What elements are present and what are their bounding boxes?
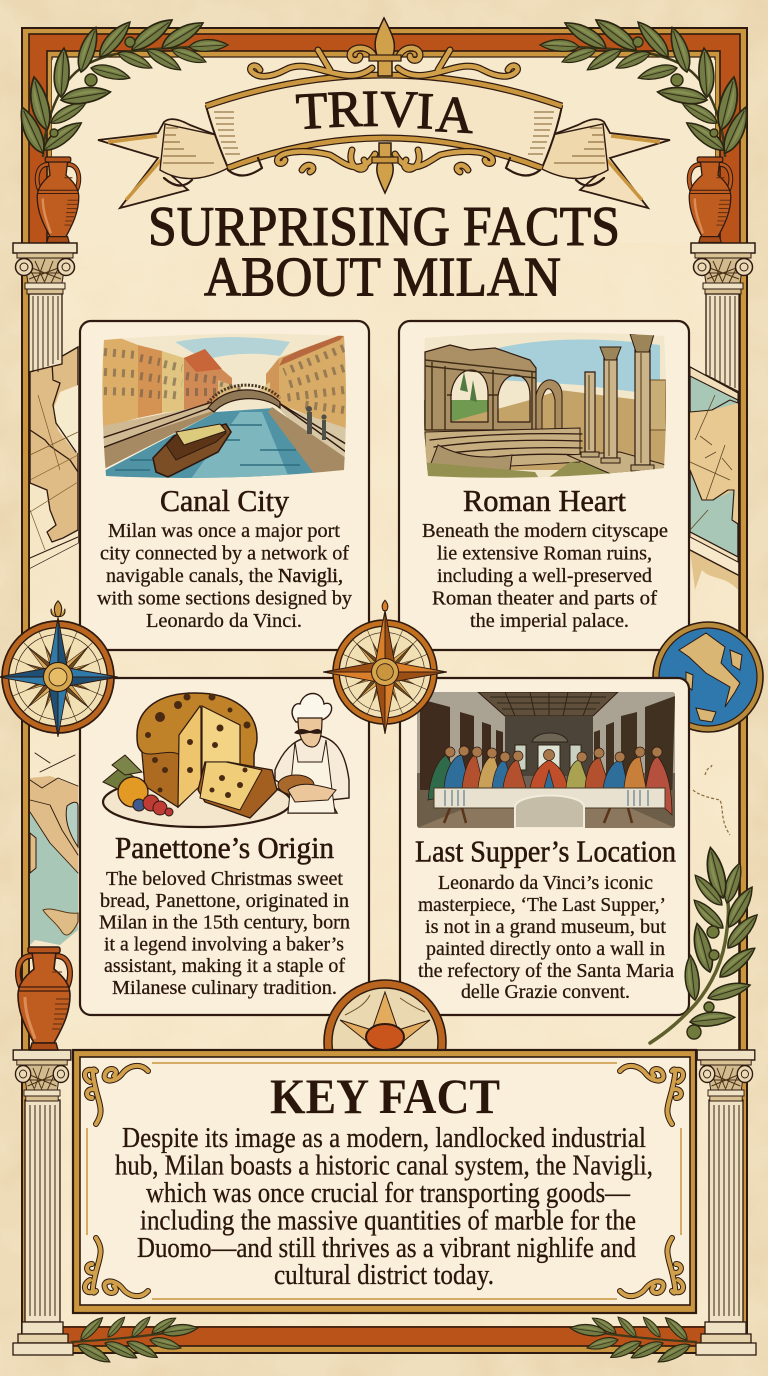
body: Panettone's Origin: assistant, making it a staple of — [104, 955, 345, 977]
body: Roman Heart — [422, 520, 668, 632]
body: Roman Heart: lie extensive Roman ruins, — [437, 542, 652, 564]
illustration: panettone and chef — [103, 693, 349, 827]
body: Roman Heart: the imperial palace. — [470, 610, 629, 632]
heading: KEY FACT: KEY FACT — [270, 1068, 500, 1124]
laurel sprig, bottom left — [71, 1314, 198, 1366]
body: Canal City — [97, 520, 353, 632]
fruit and leaves — [103, 755, 173, 816]
illustration: Roman ruins — [420, 330, 670, 480]
body: Last Supper's Location: delle Grazie convent. — [461, 981, 630, 1003]
body: Roman Heart: Roman theater and parts of — [432, 588, 657, 610]
heading: Canal City: Canal City — [160, 483, 289, 518]
body: Canal City: Leonardo da Vinci. — [146, 610, 302, 632]
laurel branch, upper left — [14, 13, 228, 157]
chef — [275, 694, 349, 813]
banner word TRIVIA: TRIVIA — [295, 81, 475, 145]
body: Roman Heart: Beneath the modern cityscape — [422, 520, 668, 542]
body: Canal City: with some sections designed by — [97, 588, 353, 610]
right lower column — [696, 1050, 756, 1355]
body: Panettone's Origin: The beloved Christmas sweet — [106, 868, 343, 890]
body: Panettone's Origin — [99, 868, 350, 999]
body: Panettone's Origin: bread, Panettone, originated in — [100, 890, 349, 912]
ribbon banner — [98, 75, 670, 208]
body: Canal City: navigable canals, the Navigli, — [106, 565, 343, 587]
illustration: canal — [100, 330, 350, 480]
body: Panettone's Origin: Milan in the 15th century, born — [99, 912, 350, 934]
body: Last Supper's Location: the refectory of the Santa Maria — [418, 960, 674, 982]
body: key fact: including the massive quantities of marble for the — [140, 1206, 636, 1236]
amphora, lower left — [18, 947, 70, 1050]
heading: Roman Heart: Roman Heart — [463, 483, 626, 518]
compass rose, left — [0, 601, 118, 737]
amphora, upper right — [689, 157, 731, 242]
card: Canal City — [80, 321, 369, 650]
half compass with map above key fact — [324, 980, 446, 1104]
body: key fact: Duomo—and still thrives as a vibrant nighlife and — [137, 1233, 636, 1264]
body: key fact — [115, 1123, 653, 1291]
body: Panettone's Origin: Milanese culinary tradition. — [112, 977, 337, 999]
right upper column — [691, 243, 755, 392]
title: ABOUT MILAN — [204, 246, 561, 308]
body: Panettone's Origin: it a legend involving a baker’s — [104, 934, 344, 956]
panel: key fact — [73, 1050, 696, 1313]
ornament above banner — [251, 18, 517, 76]
compass rose, centre — [323, 600, 447, 734]
title: SURPRISING FACTS — [148, 196, 620, 258]
illustration: The Last Supper — [417, 692, 675, 828]
body: Last Supper's Location: Leonardo da Vinci’s iconic — [438, 872, 653, 894]
left upper column — [13, 243, 77, 372]
map: sea and lands, right — [690, 367, 738, 590]
body: key fact: hub, Milan boasts a historic canal system, the Navigli, — [115, 1150, 653, 1182]
map: Italy lower left — [30, 753, 78, 945]
heading: Panettone's Origin: Panettone’s Origin — [115, 830, 334, 865]
heading: Last Supper's Location: Last Supper’s Location — [415, 834, 676, 868]
body: Last Supper's Location: painted directly onto a wall in — [426, 938, 665, 960]
body: key fact: Despite its image as a modern, landlocked industrial — [122, 1123, 646, 1154]
corner scrolls — [85, 1066, 683, 1296]
left lower column — [13, 1050, 73, 1355]
card: Roman Heart — [399, 321, 689, 650]
faint map lines, lower right — [693, 765, 730, 835]
laurel branch, lower right — [650, 846, 762, 1043]
title — [148, 196, 620, 308]
amphora, upper left — [37, 157, 79, 242]
body: Canal City: city connected by a network of — [100, 542, 349, 564]
body: Roman Heart: including a well-preserved — [437, 565, 652, 587]
body: Canal City: Milan was once a major port — [108, 520, 340, 542]
card: Last Supper's Location — [400, 678, 689, 1015]
map: northern Italy, left — [30, 347, 78, 568]
body: key fact: which was once crucial for transporting goods— — [146, 1178, 630, 1209]
laurel sprig, bottom right — [570, 1314, 697, 1366]
ornament below banner — [277, 143, 493, 193]
body: Last Supper's Location: masterpiece, ‘The Last Supper,’ — [418, 894, 666, 916]
body: key fact: cultural district today. — [274, 1260, 494, 1291]
body: Last Supper's Location — [418, 872, 674, 1003]
globe map of Italy — [653, 622, 763, 732]
laurel branch, upper right — [540, 13, 754, 157]
apostles — [428, 746, 672, 815]
body: Last Supper's Location: is not in a grand museum, but — [425, 916, 666, 938]
card: Panettone's Origin — [80, 678, 369, 1015]
